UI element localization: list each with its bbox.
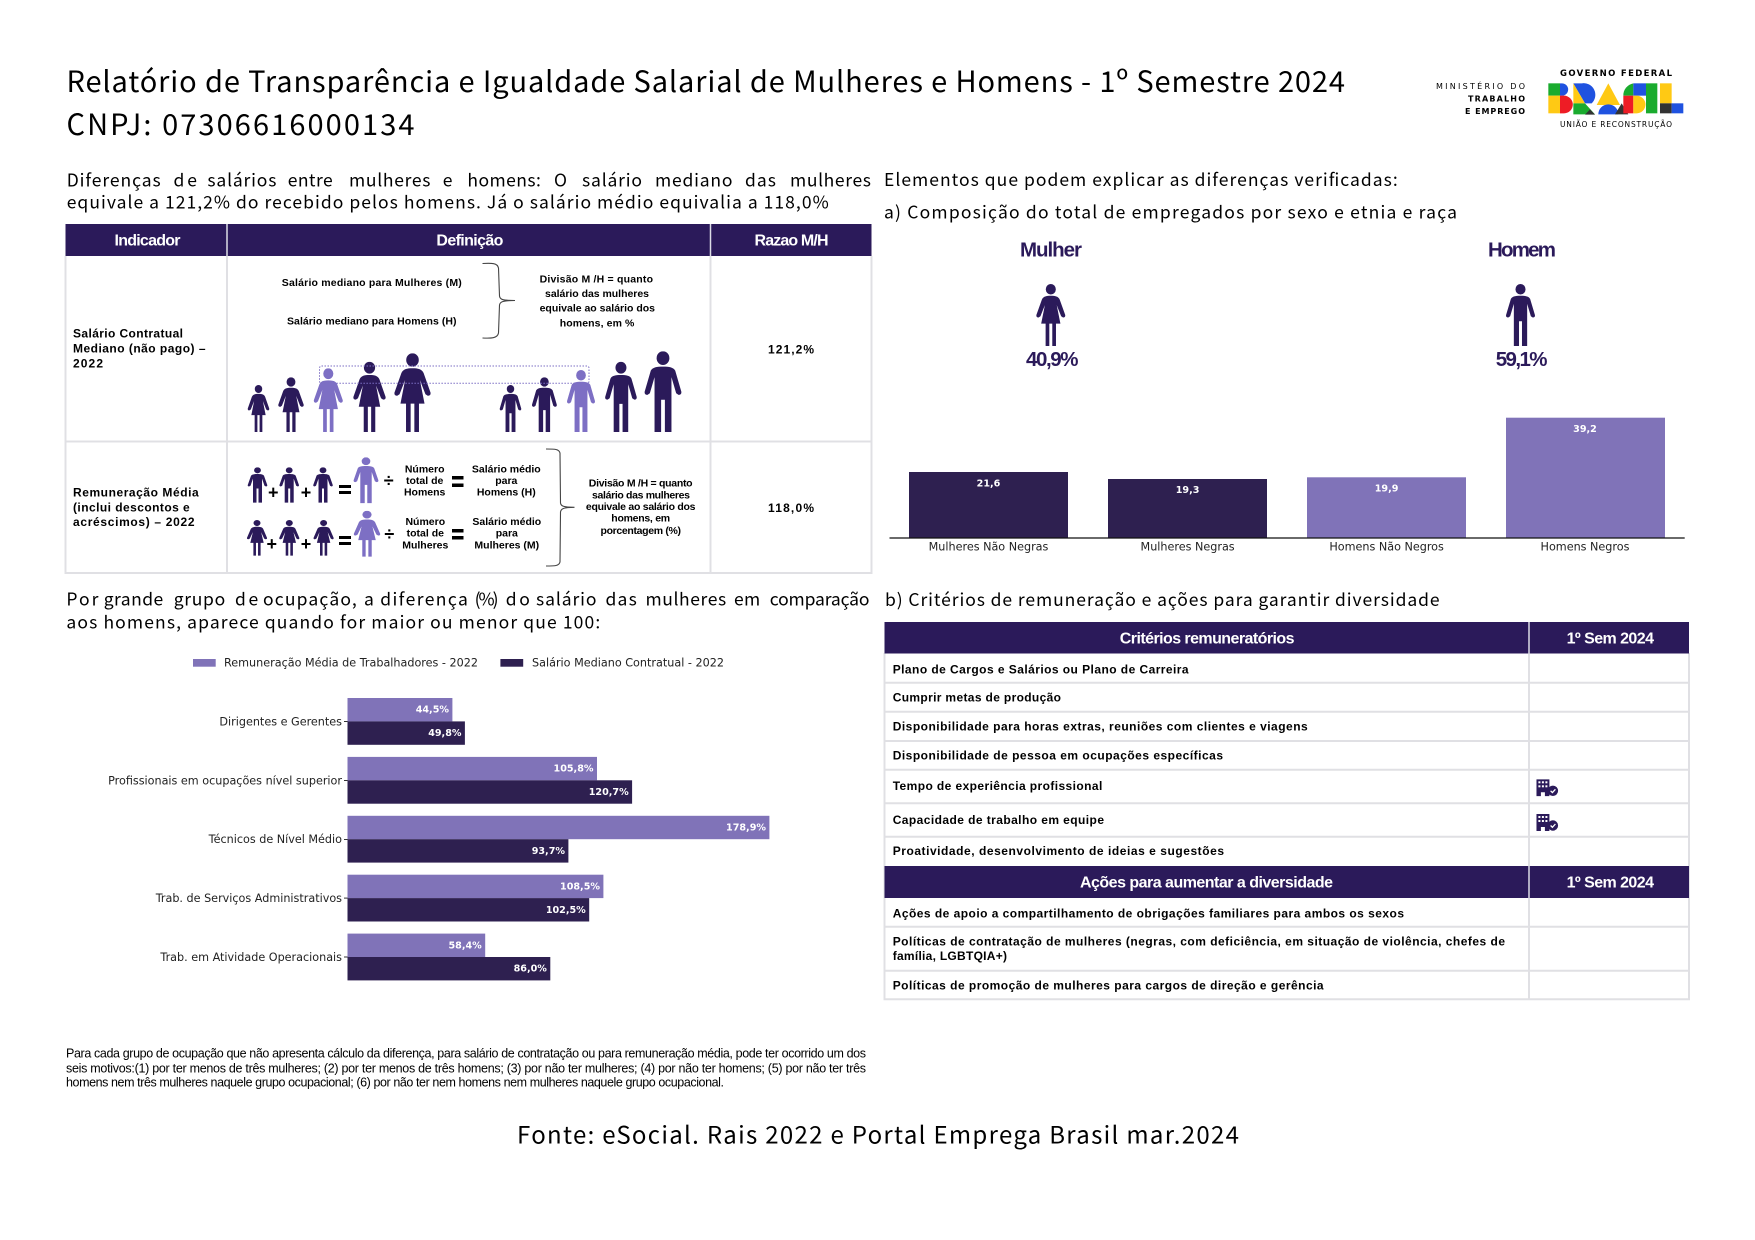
men share: Homem [1488, 239, 1556, 262]
bars: Dirigentes e Gerentes: Dirigentes e Gerentes [219, 715, 342, 728]
logo: ministério do trabalho e emprego: TRABALHO [1468, 94, 1525, 104]
bars: Dirigentes e Gerentes: 49,8% [428, 728, 462, 739]
row 1 definition labels: Salário mediano para Homens (H) [287, 316, 456, 328]
occupation group text: aos homens, aparece quando for maior ou menor que 100: [66, 609, 600, 634]
bars: Técnicos: Técnicos de Nível Médio [208, 833, 342, 846]
header: actions: Ações para aumentar a diversidade [1080, 875, 1333, 892]
intro text: salary differences: e [443, 168, 452, 192]
bars: Dirigentes e Gerentes: 44,5% [416, 705, 449, 716]
bars: Profissionais [108, 757, 632, 804]
right column heading: Elementos que podem explicar as diferenças verificadas: [884, 167, 1398, 192]
intro text: salary differences: salário [582, 168, 642, 192]
action rows: Políticas de promoção de mulheres para cargos de direção e gerência [893, 978, 1324, 992]
intro text: salary differences: mediano [655, 168, 732, 192]
footnote: seis motivos:(1) por ter menos de três mulheres; (2) por ter menos de três homens; (3) por não ter mulheres; (4) por não ter homens; (5) por não ter três [66, 1061, 866, 1075]
row 2 indicator label [73, 486, 199, 529]
formula: men average: para [495, 475, 518, 487]
bar: Homens Não Negros [1307, 477, 1466, 554]
header: actions: 1º Sem 2024 [1567, 875, 1654, 892]
formula: women average: + [301, 534, 311, 554]
footnote: Para cada grupo de ocupação que não apresenta cálculo da diferença, para salário de contratação ou para remuneração média, pode ter ocorrido um dos [66, 1046, 866, 1060]
header: criteria: 1º Sem 2024 [1567, 631, 1654, 648]
table header: Indicador [114, 232, 180, 250]
source: Fonte: eSocial. Rais 2022 e Portal Emprega Brasil mar.2024 [517, 1115, 1239, 1150]
row 2 division explanation: Divisão M /H = quanto [589, 478, 693, 490]
bars: Profissionais: Profissionais em ocupações nível superior [108, 774, 342, 787]
formula: women average: Mulheres (M) [474, 539, 539, 551]
action rows: Políticas de contratação de mulheres (negras, com deficiência, em situação de violência, chefes de [893, 934, 1505, 948]
table header: Definição [436, 232, 504, 250]
title: CNPJ: 07306616000134 [66, 102, 414, 144]
logo: ministério do trabalho e emprego [1436, 80, 1525, 116]
intro text: salary differences: O [554, 168, 567, 192]
row 1 division explanation: equivale ao salário dos [540, 303, 655, 315]
row 2 value: 118,0% [768, 501, 814, 515]
icon: building check 1 [1536, 779, 1558, 796]
occupation group text: Por [66, 587, 99, 612]
criteria rows: Plano de Cargos e Salários ou Plano de Carreira [893, 663, 1189, 677]
formula: men average: Homens (H) [477, 487, 536, 499]
formula: women average: Salário médio [472, 516, 541, 528]
row 1 value: 121,2% [768, 342, 814, 356]
women share: 40,9% [1026, 348, 1078, 371]
intro text: salary differences [67, 168, 871, 214]
formula: women average: Número [405, 516, 445, 528]
formula: men average: Homens [404, 487, 446, 499]
occupation group text: em [734, 587, 760, 612]
header: criteria: Critérios remuneratórios [1120, 631, 1295, 648]
formula: men average: ÷ [384, 470, 394, 490]
chart legend [193, 657, 724, 670]
intro text: salary differences: equivale a 121,2% do recebido pelos homens. Já o salário médio equivalia a 118,0% [67, 189, 829, 214]
formula: women average: ÷ [384, 524, 394, 544]
brace row 1 [482, 263, 515, 338]
intro text: salary differences: homens: [467, 168, 541, 192]
title: Relatório de Transparência e Igualdade Salarial de Mulheres e Homens - 1º Semestre 2024 [66, 59, 1345, 101]
bars: Serviços Administrativos: 108,5% [560, 881, 600, 892]
occupation group text: de [235, 587, 258, 612]
formula: women average [247, 511, 541, 557]
bars: Técnicos [208, 816, 769, 863]
bars: Serviços Administrativos: Trab. de Serviços Administrativos [155, 892, 342, 905]
logo: governo federal brasil: GOVERNO FEDERAL [1560, 69, 1673, 79]
formula: men average: Número [405, 464, 445, 476]
bar: Mulheres Negras [1108, 479, 1267, 554]
action rows: família, LGBTQIA+) [893, 949, 1007, 963]
action rows [893, 906, 1505, 992]
brace row 2 [546, 449, 574, 566]
occupation group text: diferença [380, 587, 468, 612]
bar: Homens Não Negros: Homens Não Negros [1329, 541, 1444, 554]
bars: Técnicos: 178,9% [726, 822, 766, 834]
criteria rows [893, 663, 1308, 858]
row 2 division explanation: equivale ao salário dos [586, 501, 696, 513]
occupation group text: do [506, 587, 530, 612]
criteria rows: Tempo de experiência profissional [893, 779, 1102, 793]
row 1 definition labels [282, 277, 462, 328]
table header: Razao M/H [754, 232, 828, 250]
occupation group text [66, 587, 869, 634]
occupation group text: ocupação, [263, 587, 357, 612]
criteria rows: Capacidade de trabalho em equipe [893, 813, 1104, 827]
bar: Homens Não Negros: 19,9 [1375, 483, 1399, 494]
row 2 division explanation [586, 478, 696, 537]
median highlight dotted box [320, 366, 589, 383]
logo: ministério do trabalho e emprego: MINISTÉRIO DO [1436, 80, 1525, 91]
formula: women average: total de [407, 528, 444, 540]
occupation group text: das [606, 587, 637, 612]
bars: Profissionais: 105,8% [554, 764, 594, 775]
occupation group text: mulheres [646, 587, 726, 612]
row 1 definition labels: Salário mediano para Mulheres (M) [282, 277, 462, 289]
bar: Mulheres Não Negras [909, 472, 1068, 554]
horizontal bar chart: occupation groups [108, 698, 769, 980]
row 2 indicator label: acréscimos) – 2022 [73, 515, 195, 529]
bars: Técnicos: 93,7% [532, 846, 565, 857]
intro text: salary differences: Diferenças [67, 168, 161, 192]
bars: Atividade Operacionais: Trab. em Atividade Operacionais [159, 951, 342, 964]
row 2 division explanation: porcentagem (%) [600, 525, 681, 537]
bar: Homens Negros: Homens Negros [1541, 541, 1630, 554]
bars: Profissionais: 120,7% [589, 787, 629, 798]
men share: 59,1% [1496, 348, 1548, 371]
intro text: salary differences: das [745, 168, 776, 192]
column chart: sex and race [890, 418, 1685, 554]
logo: governo federal brasil [1548, 69, 1683, 129]
row 1 indicator label: Mediano (não pago) – [73, 342, 206, 356]
row 2 indicator label: Remuneração Média [73, 486, 199, 500]
men share [1488, 239, 1556, 371]
occupation group text: (%) [475, 587, 499, 612]
formula: men average: Salário médio [472, 464, 541, 476]
bar: Homens Negros: 39,2 [1573, 424, 1597, 435]
intro text: salary differences: entre [288, 168, 333, 192]
formula: women average: para [496, 528, 518, 540]
formula: women average: Mulheres [402, 539, 449, 551]
table: criteria and actions [884, 622, 1689, 999]
intro text: salary differences: mulheres [790, 168, 871, 192]
icon: building check 2 [1536, 814, 1558, 831]
subheading b: b) Critérios de remuneração e ações para garantir diversidade [885, 587, 1440, 612]
criteria rows: Cumprir metas de produção [893, 690, 1061, 704]
bars: Atividade Operacionais: 86,0% [514, 964, 547, 975]
formula: women average: + [267, 534, 277, 554]
row 1 indicator label: 2022 [73, 357, 103, 371]
women share: Mulher [1020, 239, 1082, 262]
row 1 division explanation [540, 274, 655, 330]
row 1 indicator label [73, 326, 206, 371]
occupation group text: grande [104, 587, 163, 612]
header: criteria [884, 622, 1689, 654]
table header [66, 224, 872, 256]
table: indicators [66, 224, 872, 573]
row 1 division explanation: salário das mulheres [545, 288, 649, 300]
bar: Homens Negros [1506, 418, 1665, 554]
header: actions [884, 866, 1689, 898]
row 1 division explanation: Divisão M /H = quanto [540, 274, 653, 286]
intro text: salary differences: salários [207, 168, 276, 192]
bar: Mulheres Não Negras: Mulheres Não Negras [929, 541, 1049, 554]
chart legend: Salário Mediano Contratual - 2022 [532, 657, 724, 670]
bars: Atividade Operacionais [159, 934, 550, 980]
row 1 indicator label: Salário Contratual [73, 326, 183, 340]
criteria rows: Disponibilidade de pessoa em ocupações específicas [893, 748, 1223, 762]
row 2 division explanation: salário das mulheres [592, 490, 690, 502]
formula: men average [248, 457, 541, 503]
bars: Serviços Administrativos: 102,5% [546, 905, 586, 916]
logo: governo federal brasil: UNIÃO E RECONSTRUÇÃO [1560, 120, 1672, 129]
bar: Mulheres Não Negras: 21,6 [977, 478, 1001, 489]
row 2 indicator label: (inclui descontos e [73, 500, 190, 514]
formula: men average: total de [406, 475, 444, 487]
intro text: salary differences: mulheres [349, 168, 430, 192]
icons: men by median salary [500, 351, 681, 432]
bars: Atividade Operacionais: 58,4% [449, 940, 482, 951]
formula: men average: + [268, 482, 279, 502]
title [66, 59, 1345, 144]
action rows: Ações de apoio a compartilhamento de obrigações familiares para ambos os sexos [893, 906, 1404, 920]
criteria rows: Disponibilidade para horas extras, reuniões com clientes e viagens [893, 719, 1308, 733]
criteria rows: Proatividade, desenvolvimento de ideias e sugestões [893, 844, 1224, 858]
occupation group text: a [364, 587, 374, 612]
occupation group text: comparação [770, 587, 870, 612]
row 2 division explanation: homens, em [611, 513, 670, 525]
bar: Mulheres Negras: 19,3 [1176, 485, 1199, 496]
chart legend: Remuneração Média de Trabalhadores - 2022 [224, 657, 478, 670]
footnote: homens nem três mulheres naquele grupo ocupacional; (6) por não ter nem homens nem mulheres naquele grupo ocupacional. [66, 1076, 724, 1090]
intro text: salary differences: de [174, 168, 197, 192]
logo: ministério do trabalho e emprego: E EMPREGO [1465, 107, 1525, 116]
bars: Serviços Administrativos [155, 875, 603, 922]
bars: Dirigentes e Gerentes [219, 698, 465, 745]
icons: women by median salary [248, 353, 431, 432]
occupation group text: grupo [174, 587, 225, 612]
women share [1020, 239, 1082, 371]
subheading a: a) Composição do total de empregados por sexo e etnia e raça [884, 199, 1457, 224]
footnote [66, 1046, 866, 1090]
row 1 division explanation: homens, em % [560, 318, 635, 330]
formula: men average: + [301, 482, 311, 502]
occupation group text: salário [536, 587, 596, 612]
bar: Mulheres Negras: Mulheres Negras [1141, 541, 1235, 554]
